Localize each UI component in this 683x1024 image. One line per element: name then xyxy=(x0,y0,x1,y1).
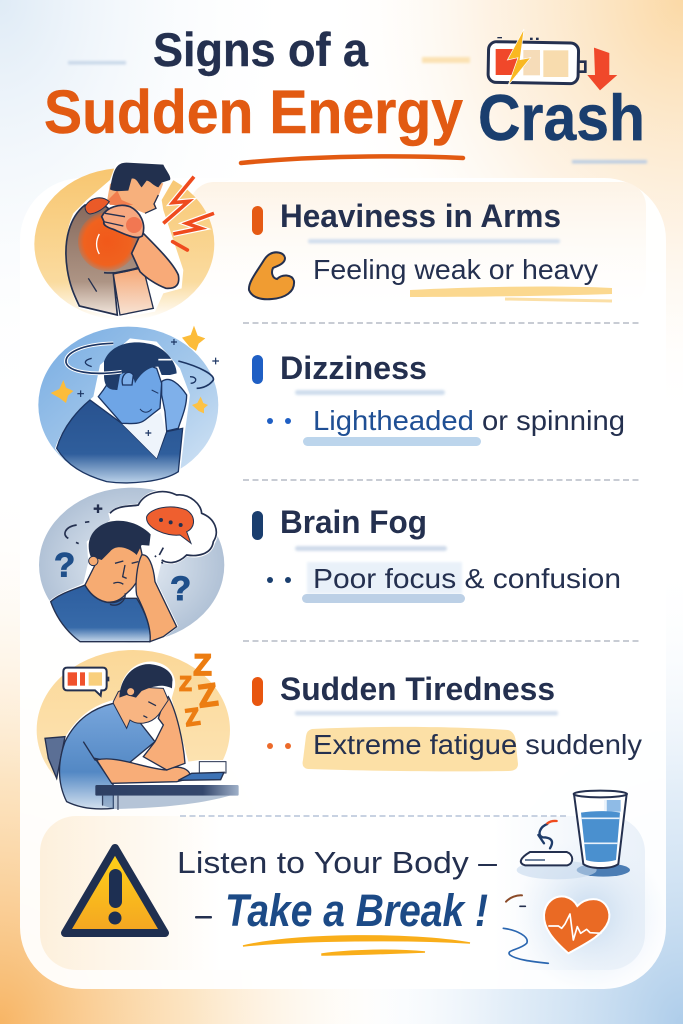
highlight xyxy=(303,437,481,446)
accent bar xyxy=(252,511,263,540)
illustration: tired man at desk xyxy=(37,649,240,811)
sleep letters xyxy=(179,649,220,732)
icon: heart with pulse line xyxy=(544,896,609,953)
divider xyxy=(243,640,640,642)
panel: sudden tiredness xyxy=(37,649,642,811)
bullet dots xyxy=(267,418,291,424)
title line: Sudden Energy: Sudden Energy xyxy=(44,78,463,146)
accent bar xyxy=(252,677,263,706)
bullet dots xyxy=(267,577,291,583)
title accent dashes xyxy=(68,57,647,164)
panel background xyxy=(190,182,646,306)
title line: Signs of a: Signs of a xyxy=(153,23,369,76)
icon: low battery with bolt and down arrow xyxy=(488,29,617,90)
battery speech bubble xyxy=(63,668,109,696)
illustration: man holding painful shoulder xyxy=(34,162,214,320)
heading: Brain Fog xyxy=(280,504,427,540)
heading underline xyxy=(295,390,445,395)
sleep letters: Z xyxy=(183,703,202,732)
divider xyxy=(180,815,568,817)
heading: Dizziness xyxy=(280,350,427,386)
question marks: ? xyxy=(170,570,191,608)
title underline xyxy=(241,156,463,163)
panel: brain fog xyxy=(39,488,621,643)
description: Feeling weak or heavy xyxy=(313,254,598,285)
callout background xyxy=(40,816,645,970)
heading underline xyxy=(295,711,558,716)
divider xyxy=(243,479,640,481)
title xyxy=(44,23,647,164)
sleep letters: Z xyxy=(193,649,212,682)
icon: warning triangle xyxy=(65,848,165,933)
description: Lightheaded or spinning xyxy=(313,405,625,436)
heading underline xyxy=(308,239,560,244)
title line: Crash: Crash xyxy=(478,81,645,154)
panel: heaviness in arms xyxy=(34,162,646,320)
accent bar xyxy=(252,206,263,235)
question marks: ? xyxy=(54,547,75,585)
callout line 2: Take a Break ! xyxy=(225,885,488,936)
white content card xyxy=(20,178,666,989)
panel: dizziness xyxy=(38,326,625,483)
callout line 1: Listen to Your Body – xyxy=(177,845,498,880)
highlight xyxy=(303,727,518,771)
yellow underlines xyxy=(243,936,470,955)
panel: listen to your body callout xyxy=(40,791,666,993)
sleep letters: Z xyxy=(196,676,220,714)
description: Extreme fatigue suddenly xyxy=(313,729,642,760)
decorative squiggle and marks xyxy=(503,895,548,963)
heading: Heaviness in Arms xyxy=(280,198,561,234)
bullet dots xyxy=(267,743,291,749)
heading: Sudden Tiredness xyxy=(280,671,555,707)
icon: flexed arm xyxy=(249,252,294,299)
heading underline xyxy=(295,546,447,551)
soft shadow xyxy=(514,837,666,993)
highlight xyxy=(302,562,465,603)
question marks xyxy=(54,547,191,608)
illustration: confused man with thought bubble xyxy=(39,488,224,643)
icon: glass of water and cushion with steam xyxy=(517,791,630,879)
highlight xyxy=(410,287,612,301)
accent bar xyxy=(252,355,263,384)
divider xyxy=(243,322,640,324)
illustration: dizzy man holding forehead xyxy=(38,326,219,483)
description: Poor focus & confusion xyxy=(313,563,621,594)
sleep letters: Z xyxy=(179,674,192,696)
